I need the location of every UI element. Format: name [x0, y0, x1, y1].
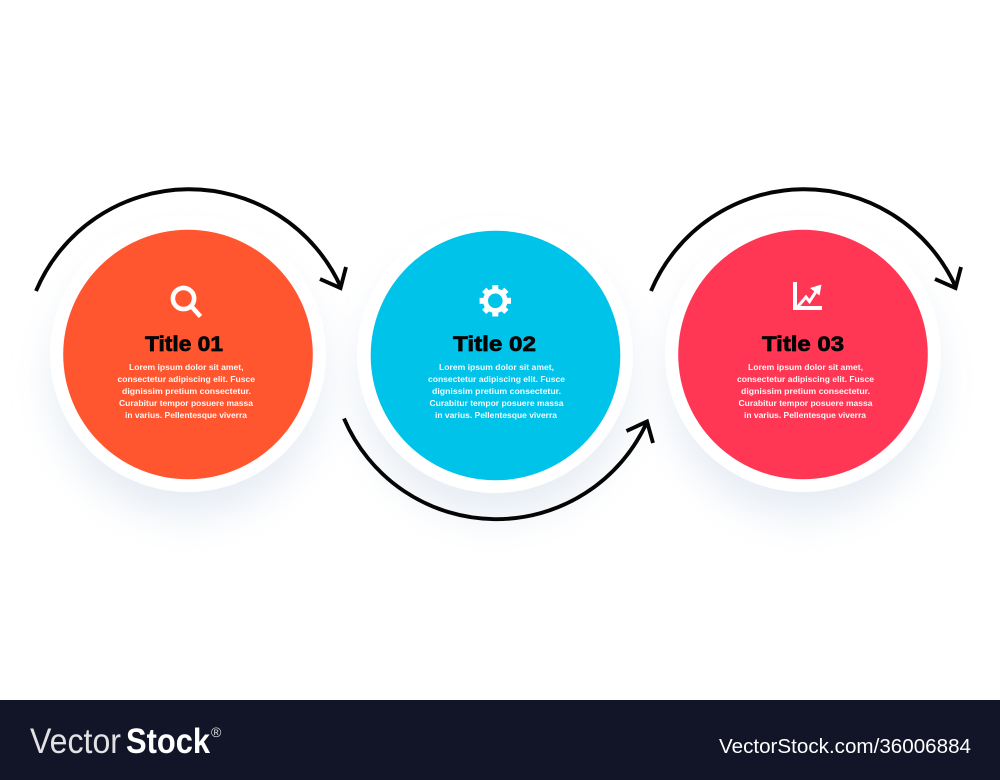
arrow: step 1 over to step 2: [36, 189, 346, 291]
blue circle: [371, 231, 620, 480]
chart axes: [793, 282, 822, 310]
text block: step 2 body: dignissim pretium consectetur.: [432, 387, 561, 396]
text block: step 3 body: Lorem ipsum dolor sit amet,: [748, 363, 863, 372]
text block: step 3 body: Curabitur tempor posuere massa: [738, 399, 873, 408]
text block: step 2 body: [428, 363, 566, 420]
text block: step 1 body: dignissim pretium consectetur.: [122, 387, 251, 396]
icon: line chart: [793, 282, 822, 310]
heading: title 02: Title 02: [453, 332, 536, 356]
footer logo: [30, 722, 222, 761]
icon: magnifier: [173, 288, 200, 316]
text block: step 3 body: [737, 363, 875, 420]
text block: step 2 body: consectetur adipiscing elit. Fusce: [428, 375, 566, 384]
heading: title 03: Title 03: [762, 332, 844, 356]
text block: step 2 body: Lorem ipsum dolor sit amet,: [439, 363, 554, 372]
footer logo: Stock: [126, 722, 210, 761]
ring shadow 1: [53, 245, 323, 515]
chart arrow head: [810, 284, 822, 296]
heading: title 01: Title 01: [145, 332, 223, 356]
icon: gear: [480, 285, 511, 316]
white ring 1: [50, 216, 326, 492]
text block: step 1 body: in varius. Pellentesque viverra: [125, 411, 248, 420]
text block: step 1 body: [118, 363, 256, 420]
footer logo: ®: [211, 724, 222, 740]
text block: step 2 body: in varius. Pellentesque viverra: [435, 411, 558, 420]
red circle: [678, 230, 928, 479]
text block: step 2 body: Curabitur tempor posuere massa: [430, 399, 564, 408]
arrow: step 3 over to next: [651, 189, 961, 291]
panel: step 3: [665, 216, 941, 515]
panel: step 1: [50, 216, 326, 515]
white ring 2: [357, 217, 633, 493]
footer bar: [0, 700, 1000, 780]
white ring 3: [665, 216, 941, 492]
text block: step 3 body: in varius. Pellentesque viverra: [744, 411, 867, 420]
text block: step 3 body: consectetur adipiscing elit. Fusce: [737, 375, 875, 384]
orange circle: [63, 230, 313, 479]
text block: step 1 body: consectetur adipiscing elit. Fusce: [118, 375, 256, 384]
footer logo: Vector: [30, 722, 121, 761]
ring shadow 2: [360, 246, 630, 516]
ring shadow 3: [668, 245, 938, 515]
text block: step 1 body: Lorem ipsum dolor sit amet,: [129, 363, 244, 372]
text block: step 1 body: Curabitur tempor posuere massa: [119, 399, 254, 408]
panel: step 2: [357, 217, 633, 516]
chart trend arrow: [798, 290, 817, 306]
footer image id: VectorStock.com/36006884: [719, 735, 971, 758]
arrow: step 2 under to step 3: [344, 418, 653, 519]
text block: step 3 body: dignissim pretium consectetur.: [741, 387, 870, 396]
